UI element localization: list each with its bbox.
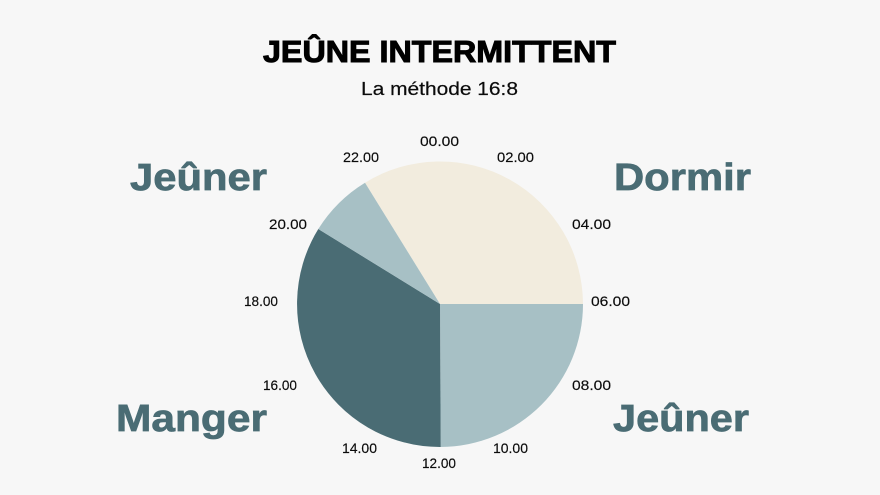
slice: morning fast (Jeûner): [440, 304, 583, 447]
slice: eating window (Manger): [297, 229, 441, 447]
clock hour labels: [244, 133, 630, 471]
clock hour labels: 02.00: [497, 149, 534, 165]
clock hour labels: 20.00: [269, 216, 307, 232]
clock hour labels: 00.00: [420, 133, 459, 149]
clock hour labels: 12.00: [422, 455, 456, 471]
clock hour labels: 18.00: [244, 293, 278, 309]
label: Jeûner top left: Jeûner: [130, 157, 267, 199]
slice: evening fast (Jeûner): [318, 183, 440, 304]
clock hour labels: 08.00: [572, 377, 611, 393]
clock hour labels: 16.00: [263, 377, 297, 393]
pie chart: 16:8 fasting clock: [297, 161, 583, 447]
clock hour labels: 14.00: [342, 440, 377, 456]
label: Jeûner bottom right: Jeûner: [613, 398, 749, 440]
clock hour labels: 22.00: [343, 149, 379, 165]
label: Dormir: Dormir: [614, 157, 751, 199]
clock hour labels: 04.00: [572, 216, 611, 232]
title: JEÛNE INTERMITTENT: [263, 33, 616, 69]
clock hour labels: 10.00: [493, 440, 528, 456]
clock hour labels: 06.00: [591, 293, 630, 309]
label: Manger: Manger: [116, 398, 267, 440]
slice: sleep (Dormir): [365, 161, 583, 304]
subtitle: La méthode 16:8: [361, 78, 518, 99]
